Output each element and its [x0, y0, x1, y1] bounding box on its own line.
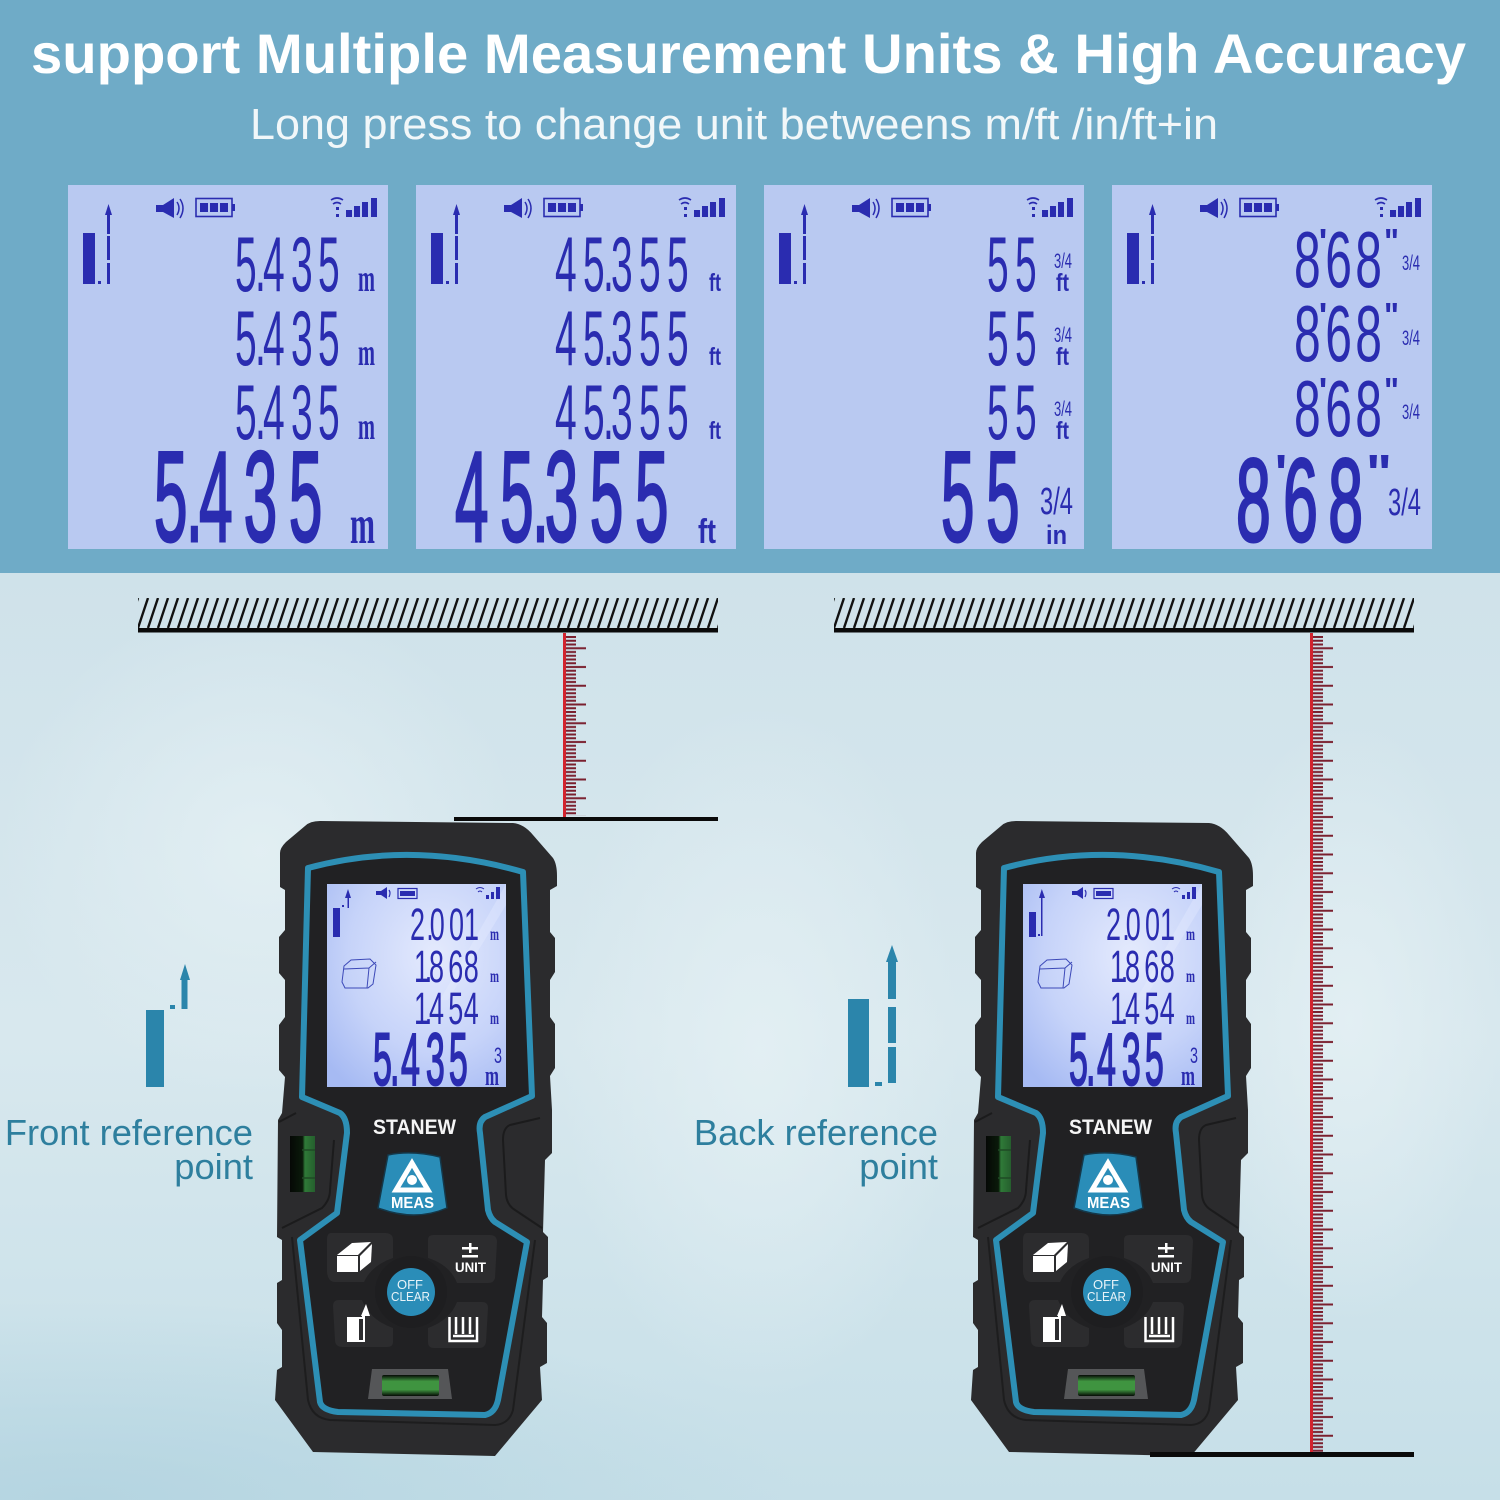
device: front reference: CLEAR: [391, 1289, 430, 1304]
panel: feet display: 45.355: [555, 221, 689, 309]
device: front reference: m: [490, 1008, 499, 1028]
panel: feet and fractional inches display: 3/4: [1054, 398, 1072, 421]
panel: feet inches display: [1112, 185, 1432, 567]
panel: metres display: m: [358, 258, 375, 300]
panel: feet and fractional inches display: in: [1046, 520, 1067, 550]
panel: metres display: m: [350, 494, 375, 555]
panel: feet display: [416, 185, 736, 569]
device: front reference: [275, 821, 557, 1456]
device: front reference: UNIT: [455, 1259, 486, 1275]
device: back reference: [971, 821, 1253, 1456]
panel: feet and fractional inches display: 55: [987, 369, 1037, 457]
panel: feet display: ft: [698, 513, 716, 551]
scene background: [0, 573, 1500, 1500]
panel: feet inches display: ": [1384, 370, 1399, 411]
device: front reference: 5.435: [373, 1019, 468, 1102]
device: back reference: 3: [1190, 1043, 1198, 1068]
panel: feet and fractional inches display: ft: [1056, 343, 1070, 371]
icon: front reference point: [146, 964, 190, 1087]
panel: feet and fractional inches display: 3/4: [1040, 481, 1073, 523]
panel: feet inches display: 3/4: [1402, 252, 1420, 275]
panel: feet display: ft: [709, 343, 721, 371]
panel: feet and fractional inches display: 55: [987, 221, 1037, 309]
device: front reference: MEAS: [391, 1195, 434, 1212]
panel: feet display: 45.355: [555, 369, 689, 457]
label: back reference point: point: [859, 1146, 938, 1187]
panel: feet and fractional inches display: 55: [941, 426, 1020, 569]
panel: feet and fractional inches display: [764, 185, 1084, 569]
panel: feet inches display: 868: [1294, 288, 1382, 378]
right red measuring ruler: [1310, 633, 1333, 1452]
left red measuring ruler: [563, 633, 586, 817]
panel: feet inches display: 3/4: [1388, 482, 1421, 524]
device: back reference: STANEW: [1069, 1116, 1152, 1139]
device: back reference: m: [1186, 1008, 1195, 1028]
device: front reference: 1.868: [414, 941, 479, 992]
device: back reference: m: [1186, 924, 1195, 944]
device: front reference: STANEW: [373, 1116, 456, 1139]
panel: feet inches display: 3/4: [1402, 327, 1420, 350]
panel: metres display: m: [358, 332, 375, 374]
panel: feet inches display: 868: [1294, 214, 1382, 304]
device: front reference: 2.001: [410, 899, 479, 950]
label: front reference point: Front reference: [5, 1112, 253, 1153]
right reference line: [1150, 1452, 1414, 1457]
left reference line: [454, 817, 718, 821]
panel: feet and fractional inches display: ft: [1056, 417, 1070, 445]
label: front reference point: point: [174, 1146, 253, 1187]
device: front reference: OFF: [397, 1277, 423, 1292]
device: back reference: OFF: [1093, 1277, 1119, 1292]
device: front reference: m: [485, 1061, 499, 1092]
panel: feet inches display: ': [1275, 445, 1287, 503]
device: back reference: UNIT: [1151, 1259, 1182, 1275]
panel: feet and fractional inches display: ft: [1056, 269, 1070, 297]
panel: feet inches display: ': [1319, 221, 1327, 262]
panel: feet inches display: 868: [1236, 436, 1363, 567]
icon: back reference point: [848, 945, 898, 1087]
panel: metres display: 5.435: [235, 221, 340, 309]
panel: feet inches display: ": [1384, 221, 1399, 262]
panel: feet and fractional inches display: 3/4: [1054, 250, 1072, 273]
subtitle: Long press to change unit betweens m/ft /in/ft+in: [250, 100, 1218, 149]
label: back reference point: Back reference: [694, 1112, 938, 1153]
device: back reference: MEAS: [1087, 1195, 1130, 1212]
device: front reference: m: [490, 924, 499, 944]
device: front reference: 1.454: [414, 983, 479, 1034]
panel: metres display: 5.435: [154, 426, 322, 569]
device: back reference: m: [1181, 1061, 1195, 1092]
panel: feet inches display: ': [1319, 370, 1327, 411]
panel: metres display: m: [358, 406, 375, 448]
device: front reference: 3: [494, 1043, 502, 1068]
panel: feet inches display: ": [1366, 445, 1392, 503]
title: support Multiple Measurement Units & High Accuracy: [31, 22, 1466, 85]
panel: feet inches display: 3/4: [1402, 401, 1420, 424]
device: back reference: 1.454: [1110, 983, 1175, 1034]
panel: metres display: [68, 185, 388, 569]
panel: feet and fractional inches display: 55: [987, 295, 1037, 383]
panel: feet display: 45.355: [455, 426, 668, 569]
device: back reference: 2.001: [1106, 899, 1175, 950]
panel: metres display: 5.435: [235, 369, 340, 457]
device: back reference: CLEAR: [1087, 1289, 1126, 1304]
device: back reference: 1.868: [1110, 941, 1175, 992]
panel: feet display: ft: [709, 269, 721, 297]
panel: metres display: 5.435: [235, 295, 340, 383]
left ceiling hatch: [138, 598, 718, 632]
panel: feet display: ft: [709, 417, 721, 445]
panel: feet inches display: 868: [1294, 363, 1382, 453]
device: front reference: m: [490, 966, 499, 986]
right ceiling hatch: [834, 598, 1414, 632]
panel: feet display: 45.355: [555, 295, 689, 383]
device: back reference: 5.435: [1069, 1019, 1164, 1102]
header band: [0, 0, 1500, 573]
device: back reference: m: [1186, 966, 1195, 986]
panel: feet inches display: ": [1384, 295, 1399, 336]
panel: feet inches display: ': [1319, 295, 1327, 336]
panel: feet and fractional inches display: 3/4: [1054, 324, 1072, 347]
